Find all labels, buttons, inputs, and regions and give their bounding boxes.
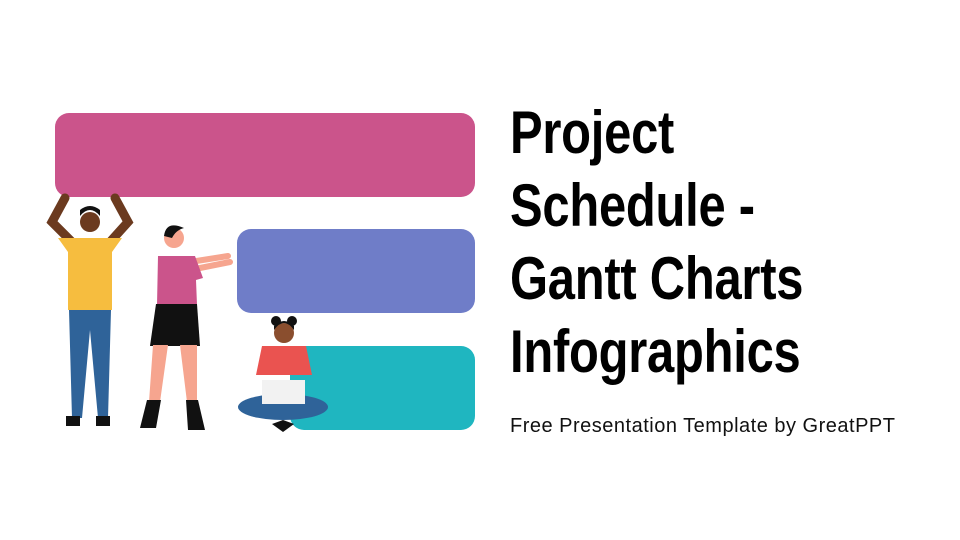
title: Infographics xyxy=(510,318,800,385)
title: Project xyxy=(510,99,674,166)
title: Schedule - xyxy=(510,172,755,239)
bar: purple xyxy=(237,229,475,313)
subtitle: Free Presentation Template by GreatPPT xyxy=(510,415,895,437)
bar: teal xyxy=(290,346,475,430)
title: Gantt Charts xyxy=(510,245,803,312)
title xyxy=(510,99,803,385)
figure: girl with laptop xyxy=(238,316,328,432)
bar: pink xyxy=(55,113,475,197)
figure: woman pointing xyxy=(140,225,230,430)
figure: man holding bar xyxy=(52,198,128,426)
